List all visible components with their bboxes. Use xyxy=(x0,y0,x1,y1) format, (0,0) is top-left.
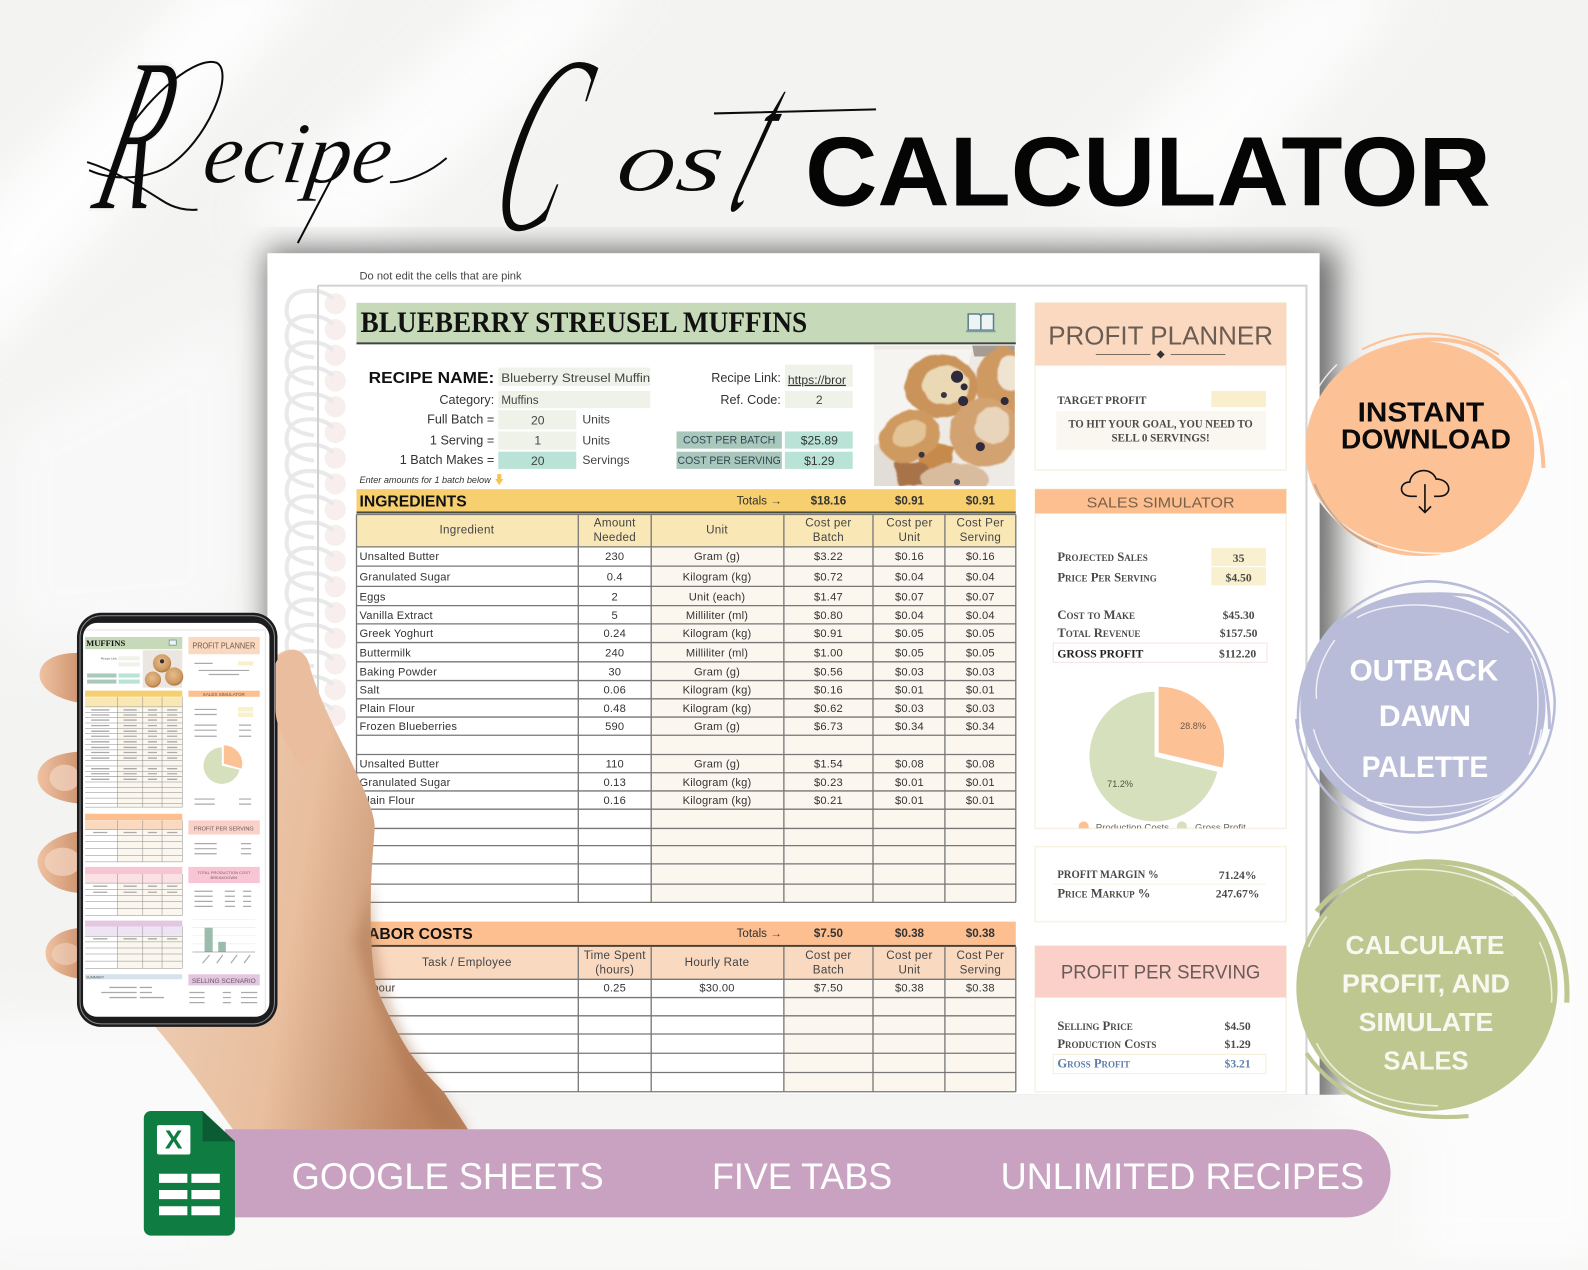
mini selling scenario: SELLING SCENARIO xyxy=(192,978,256,985)
ingredients table: Kilogram (kg) xyxy=(683,628,752,640)
ingredients table: Unsalted Butter xyxy=(360,759,439,771)
recipe details block: Category: xyxy=(439,393,494,407)
ingredients table: $0.07 xyxy=(966,592,995,604)
recipe details block: RECIPE NAME: xyxy=(369,370,494,387)
recipe details block: Enter amounts for 1 batch below xyxy=(360,475,492,485)
recipe details block: $25.89 xyxy=(801,434,838,448)
ingredients table: Cost per xyxy=(886,517,933,530)
panel: sales simulator: Projected Sales xyxy=(1057,550,1148,564)
ingredients table: $0.56 xyxy=(814,667,843,679)
panel: sales simulator: Total Revenue xyxy=(1057,626,1140,640)
panel: sales simulator: Cost to Make xyxy=(1057,608,1135,622)
recipe details block: 2 xyxy=(816,393,823,407)
ingredients table: $0.03 xyxy=(895,703,924,715)
ingredients table: $0.07 xyxy=(895,592,924,604)
ingredients table: Salt xyxy=(360,685,380,697)
ingredients table: Kilogram (kg) xyxy=(683,571,752,583)
mini cost breakdown and bar chart: TOTAL PRODUCTION COST xyxy=(197,870,251,875)
labor costs table: Cost Per xyxy=(957,949,1004,962)
ingredients table: $0.21 xyxy=(814,795,843,807)
ingredients table: $0.05 xyxy=(895,647,924,659)
ingredients table: Plain Flour xyxy=(360,795,415,807)
ingredients band: $0.91 xyxy=(895,494,925,507)
pie chart: production costs vs gross profit xyxy=(1079,687,1246,833)
ingredients table: Batch xyxy=(813,531,844,544)
script heading: Recipe Cost: os xyxy=(611,114,731,210)
ingredients table: 30 xyxy=(608,667,621,679)
badge: outback dawn palette: PALETTE xyxy=(1362,751,1488,784)
ingredients table: Unit (each) xyxy=(689,592,745,604)
ingredients table: Milliliter (ml) xyxy=(686,647,748,659)
recipe details block: Ref. Code: xyxy=(720,393,781,407)
phone screen: miniature spreadsheet xyxy=(84,630,265,1013)
mini profit per serving xyxy=(188,820,260,854)
recipe details block: Blueberry Streusel Muffin xyxy=(501,372,650,385)
ingredients table: $0.16 xyxy=(814,685,843,697)
script heading: Recipe Cost: R xyxy=(75,13,201,259)
badge: calculate profit and simulate sales: CALCULATE xyxy=(1345,930,1504,960)
pie legend: Gross Profit xyxy=(1195,822,1246,833)
panel: profit per serving: Selling Price xyxy=(1057,1019,1133,1033)
pie chart: production costs vs gross profit: 71.2% xyxy=(1107,779,1133,789)
mini cost breakdown and bar chart: BREAKDOWN xyxy=(211,875,237,880)
labor costs table: Unit xyxy=(899,963,921,976)
ingredients table: 0.06 xyxy=(604,685,626,697)
panel: sales simulator: $112.20 xyxy=(1219,647,1256,660)
ingredients band: $0.91 xyxy=(966,494,995,507)
ingredients table: Serving xyxy=(960,531,1001,544)
mini recipe details xyxy=(87,656,140,684)
pie legend: Production Costs xyxy=(1096,822,1169,833)
ingredients table: $0.04 xyxy=(895,610,924,622)
ingredients table: $0.62 xyxy=(814,703,843,715)
ingredients table: Eggs xyxy=(360,592,386,604)
panel: sales simulator: GROSS PROFIT xyxy=(1057,647,1144,660)
mini profit planner: PROFIT PLANNER xyxy=(192,642,255,651)
ingredients table: $1.00 xyxy=(814,647,843,659)
ingredients table: Vanilla Extract xyxy=(360,610,434,622)
labor costs table: Time Spent xyxy=(584,949,646,962)
ingredients table: Gram (g) xyxy=(694,667,740,679)
labor costs table: $0.38 xyxy=(895,982,924,994)
ingredients table: Kilogram (kg) xyxy=(683,703,752,715)
ingredients table: Ingredient xyxy=(440,524,495,537)
recipe details block: 1 Serving = xyxy=(430,434,494,448)
mini sales simulator xyxy=(188,691,260,804)
note: do not edit: Do not edit the cells that are pink xyxy=(360,271,522,283)
ingredients table: Milliliter (ml) xyxy=(686,610,748,622)
icon: open book xyxy=(966,314,996,332)
spiral binding rings xyxy=(287,286,335,770)
labor costs table: $30.00 xyxy=(699,982,735,994)
mini summary xyxy=(85,974,182,998)
mini profit planner xyxy=(188,637,260,674)
mini sales simulator: SALES SIMULATOR xyxy=(203,692,246,697)
pie legend xyxy=(1078,821,1246,828)
photo: blueberry muffins xyxy=(874,345,1015,486)
ingredients table: $0.16 xyxy=(895,551,924,563)
recipe details block: 1 xyxy=(534,434,541,448)
sheet shadow xyxy=(267,249,1337,1120)
panel: profit per serving: PROFIT PER SERVING xyxy=(1061,962,1260,983)
recipe details block: COST PER SERVING xyxy=(678,455,781,467)
icon: cloud download xyxy=(1402,471,1449,512)
recipe details block: Full Batch = xyxy=(427,412,494,426)
ingredients table: $0.72 xyxy=(814,571,843,583)
labor costs table: Labour xyxy=(360,982,395,994)
banner: features: FIVE TABS xyxy=(712,1155,892,1197)
ingredients table: Baking Powder xyxy=(360,667,437,679)
labor band: LABOR COSTS xyxy=(359,926,473,943)
banner: features: GOOGLE SHEETS xyxy=(292,1155,604,1197)
panel: sales simulator: Price Per Serving xyxy=(1057,570,1157,584)
panel: profit margin and markup: 71.24% xyxy=(1219,869,1256,882)
recipe details block: Units xyxy=(582,434,610,448)
mini profit per serving: PROFIT PER SERVING xyxy=(194,826,254,832)
labor band: $7.50 xyxy=(814,927,843,940)
mini title band xyxy=(85,637,182,649)
thumb over phone edge xyxy=(275,650,334,770)
labor costs table: Cost per xyxy=(805,949,852,962)
ingredients table: $0.34 xyxy=(966,721,995,733)
badge: calculate profit and simulate sales: PROFIT, AND xyxy=(1342,969,1510,999)
recipe details block: 1 Batch Makes = xyxy=(400,453,494,467)
ingredients table: $1.54 xyxy=(814,759,843,771)
ingredients table: Greek Yoghurt xyxy=(360,628,434,640)
panel: profit per serving: $1.29 xyxy=(1225,1038,1251,1051)
script heading: Recipe Cost xyxy=(75,1,876,287)
mini recipe details: Recipe Link: xyxy=(101,656,118,660)
recipe details block: Servings xyxy=(582,453,630,467)
recipe details block: Muffins xyxy=(501,394,539,407)
bold heading: CALCULATOR: CALCULATOR xyxy=(805,117,1491,227)
ingredients table: Granulated Sugar xyxy=(360,571,451,583)
ingredients table: $0.03 xyxy=(895,667,924,679)
ingredients table: 5 xyxy=(612,610,618,622)
title xyxy=(75,1,1491,287)
mini bars xyxy=(192,920,255,963)
ingredients band: INGREDIENTS xyxy=(360,493,467,510)
pie chart: production costs vs gross profit: 28.8% xyxy=(1180,721,1206,731)
labor costs table: Batch xyxy=(813,963,844,976)
labor costs table: Task / Employee xyxy=(422,956,512,969)
ingredients table: 0.13 xyxy=(604,777,626,789)
mini title band: MUFFINS xyxy=(86,638,125,648)
ingredients table: $0.04 xyxy=(895,571,924,583)
labor costs table: (hours) xyxy=(595,963,634,976)
banner: features: UNLIMITED RECIPES xyxy=(1001,1155,1364,1197)
mini labor table xyxy=(85,814,182,862)
ingredients table: 230 xyxy=(605,551,624,563)
ingredients table: $0.80 xyxy=(814,610,843,622)
script heading: Recipe Cost: ecipe xyxy=(198,106,399,202)
ingredients table: $0.01 xyxy=(895,777,924,789)
panel: sales simulator: $45.30 xyxy=(1223,609,1255,622)
ingredients table: Unit xyxy=(706,524,728,537)
labor costs table: 0.25 xyxy=(604,982,626,994)
ingredients table: $3.22 xyxy=(814,551,843,563)
ingredients band: $18.16 xyxy=(811,494,847,507)
panel: profit per serving: $3.21 xyxy=(1225,1057,1251,1070)
badge: outback dawn palette xyxy=(1296,581,1555,832)
ingredients table: $0.01 xyxy=(895,795,924,807)
ingredients table: 110 xyxy=(606,759,624,771)
hand holding phone xyxy=(37,650,470,1132)
panel: sales simulator xyxy=(1035,489,1286,833)
ingredients table: 0.48 xyxy=(604,703,626,715)
labor costs table: Hourly Rate xyxy=(685,956,749,969)
panel: sales simulator: $157.50 xyxy=(1220,627,1258,640)
ingredients table: Unit xyxy=(899,531,921,544)
ingredients table: $0.03 xyxy=(966,703,995,715)
labor costs table xyxy=(356,922,1016,1092)
panel: profit planner: TO HIT YOUR GOAL, YOU NEED TO xyxy=(1068,417,1253,430)
ingredients table: Amount xyxy=(594,517,636,530)
recipe details block: COST PER BATCH xyxy=(683,435,775,447)
badge: instant download: DOWNLOAD xyxy=(1341,424,1511,455)
mini cost breakdown and bar chart xyxy=(188,867,260,963)
ingredients table: $0.04 xyxy=(966,571,995,583)
ingredients table: $0.01 xyxy=(966,777,995,789)
recipe details block: 20 xyxy=(531,454,545,468)
labor band: $0.38 xyxy=(966,927,995,940)
ingredients table: Cost per xyxy=(805,517,852,530)
panel: profit planner xyxy=(1035,303,1286,470)
panel: profit per serving xyxy=(1035,946,1286,1092)
ingredients band xyxy=(356,489,1016,513)
ingredients table: $0.01 xyxy=(966,685,995,697)
recipe title band xyxy=(356,303,1016,344)
badge: instant download xyxy=(1305,334,1543,556)
mini ingredients table xyxy=(85,691,182,807)
badge: calculate profit and simulate sales: SALES xyxy=(1383,1045,1468,1075)
panel: sales simulator: 35 xyxy=(1233,552,1245,565)
ingredients table: Granulated Sugar xyxy=(360,777,451,789)
panel: profit per serving: Gross Profit xyxy=(1057,1056,1130,1070)
panel: profit planner: SELL 0 SERVINGS! xyxy=(1111,432,1210,445)
ingredients table: $0.01 xyxy=(966,795,995,807)
ingredients table: Kilogram (kg) xyxy=(683,777,752,789)
ingredients band: Totals → xyxy=(737,494,782,507)
ingredients table: Plain Flour xyxy=(360,703,415,715)
ingredients table: $0.91 xyxy=(814,628,843,640)
badge: instant download: INSTANT xyxy=(1358,396,1485,427)
mini pie chart xyxy=(204,745,242,784)
ingredients table: $0.05 xyxy=(895,628,924,640)
ingredients table: 590 xyxy=(605,721,624,733)
script heading: Recipe Cost: C xyxy=(468,1,619,287)
labor costs table: Cost per xyxy=(886,949,933,962)
ingredients table: Buttermilk xyxy=(360,647,411,659)
panel: profit margin and markup: PROFIT MARGIN % xyxy=(1057,868,1159,881)
panel: spreadsheet page xyxy=(267,253,1320,1095)
recipe details block: $1.29 xyxy=(804,454,835,468)
ingredients table: Gram (g) xyxy=(694,759,740,771)
panel: profit planner: TARGET PROFIT xyxy=(1057,394,1147,407)
ingredients table: Cost Per xyxy=(957,517,1004,530)
labor band: Totals → xyxy=(737,927,782,940)
labor costs table: $7.50 xyxy=(814,982,843,994)
labor band: $0.38 xyxy=(895,927,925,940)
recipe title band: BLUEBERRY STREUSEL MUFFINS xyxy=(361,307,807,339)
ingredients table: $6.73 xyxy=(814,721,843,733)
recipe details block: Units xyxy=(582,412,610,426)
ingredients table: Kilogram (kg) xyxy=(683,795,752,807)
badge: outback dawn palette: DAWN xyxy=(1379,700,1471,733)
ingredients table: 0.4 xyxy=(607,571,623,583)
ingredients table: $0.05 xyxy=(966,628,995,640)
panel: sales simulator: SALES SIMULATOR xyxy=(1087,494,1235,511)
ingredients table: $0.16 xyxy=(966,551,995,563)
ingredients table: $0.08 xyxy=(895,759,924,771)
ingredients table xyxy=(356,489,1016,902)
script heading: Recipe Cost: t xyxy=(706,22,820,258)
ingredients table: $1.47 xyxy=(814,592,843,604)
mini muffin photo xyxy=(143,650,183,688)
ingredients table: Kilogram (kg) xyxy=(683,685,752,697)
recipe details block xyxy=(360,365,853,485)
panel: profit per serving: Production Costs xyxy=(1057,1037,1156,1051)
labor band xyxy=(356,922,1016,947)
panel: sales simulator: $4.50 xyxy=(1226,571,1252,584)
labor costs table: $0.38 xyxy=(966,982,995,994)
ingredients table: Unsalted Butter xyxy=(360,551,439,563)
badge: calculate profit and simulate sales xyxy=(1296,862,1567,1117)
ingredients table: $0.23 xyxy=(814,777,843,789)
phone xyxy=(77,613,277,1027)
ingredients table: Gram (g) xyxy=(694,721,740,733)
icon: google sheets logo: X xyxy=(165,1124,183,1154)
mini overhead table xyxy=(85,921,182,968)
ingredients table: 0.24 xyxy=(604,628,626,640)
labor costs table: Serving xyxy=(960,963,1001,976)
panel: profit margin and markup xyxy=(1035,847,1286,922)
ingredients table: 240 xyxy=(605,647,624,659)
panel: profit per serving: $4.50 xyxy=(1225,1020,1251,1033)
ingredients table: 0.16 xyxy=(604,795,626,807)
ingredients table: $0.08 xyxy=(966,759,995,771)
panel: profit planner: PROFIT PLANNER xyxy=(1048,320,1273,350)
mini packaging table xyxy=(85,867,182,916)
panel: profit margin and markup: Price Markup % xyxy=(1057,886,1150,900)
mini selling scenario xyxy=(188,974,260,1003)
ingredients table: 2 xyxy=(612,592,618,604)
mini summary: SUMMARY xyxy=(86,975,105,979)
icon: google sheets logo xyxy=(144,1111,235,1236)
banner: features xyxy=(225,1129,1391,1217)
ingredients table: $0.34 xyxy=(895,721,924,733)
badge: calculate profit and simulate sales: SIMULATE xyxy=(1359,1007,1493,1037)
ingredients table: Needed xyxy=(593,531,636,544)
badge: outback dawn palette: OUTBACK xyxy=(1349,655,1498,688)
recipe details block: 20 xyxy=(531,413,545,427)
ingredients table: $0.01 xyxy=(895,685,924,697)
ingredients table: $0.03 xyxy=(966,667,995,679)
ingredients table: Frozen Blueberries xyxy=(360,721,457,733)
recipe details block: https://bror xyxy=(788,373,846,387)
recipe details block: Recipe Link: xyxy=(711,371,781,385)
ingredients table: $0.05 xyxy=(966,647,995,659)
panel: profit margin and markup: 247.67% xyxy=(1216,887,1259,900)
ingredients table: $0.04 xyxy=(966,610,995,622)
ingredients table: Gram (g) xyxy=(694,551,740,563)
